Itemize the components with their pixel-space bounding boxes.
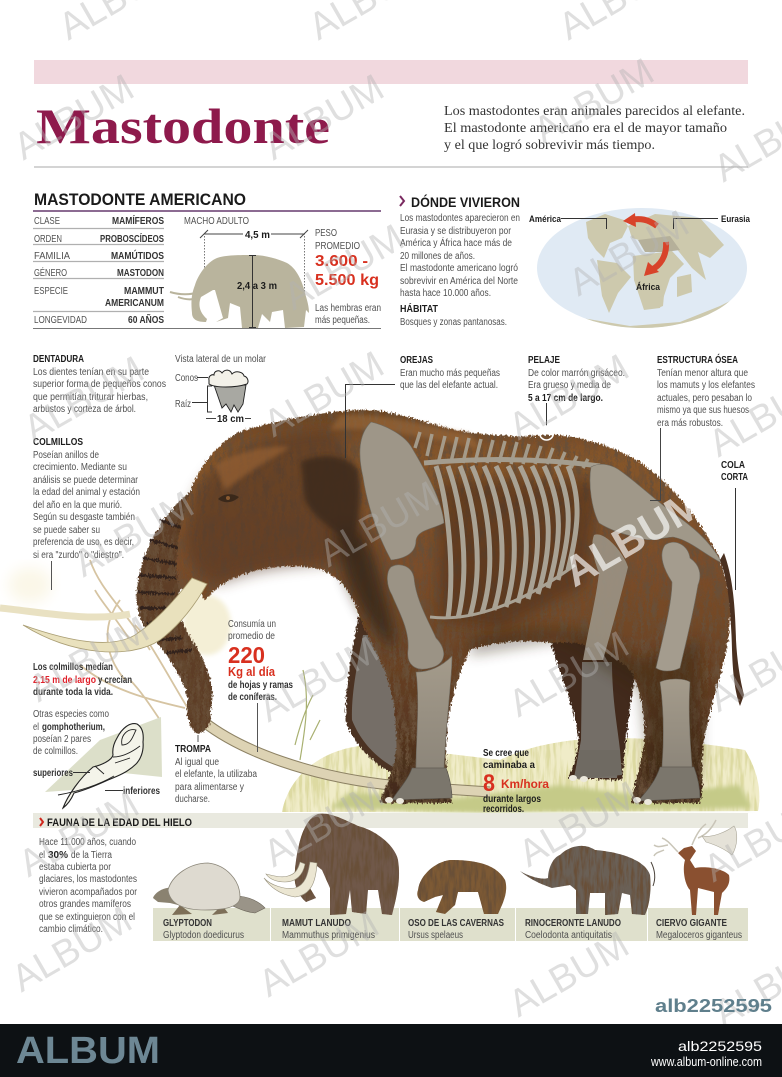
panel: donde vivieron [400, 195, 751, 340]
taxonomy table: MASTODON [117, 268, 164, 279]
text: trompa: para alimentarse y [175, 782, 244, 793]
watermarks: ALBUM [17, 349, 151, 451]
silhouette with dimensions: 4,5 m [245, 230, 270, 241]
tail [720, 553, 744, 706]
text: colmillos: Según su desgaste también [33, 512, 135, 523]
hind foot bones [638, 767, 700, 801]
molar diagram: Raíz [175, 399, 191, 410]
text: fauna: que se extinguieron con el [39, 912, 135, 923]
text: colmillos largo: 2,15 m de largo [33, 675, 96, 686]
watermarks: ALBUM [257, 344, 391, 446]
text: estructura osea: Tenían menor altura que [657, 368, 748, 379]
footer logo: ALBUM [16, 1030, 160, 1072]
molar diagram: Vista lateral de un molar [175, 354, 267, 365]
animal: glyptodon [153, 863, 265, 915]
animal names: GLYPTODON [163, 918, 212, 929]
animal names: Ursus spelaeus [408, 930, 463, 941]
taxonomy table: GÉNERO [34, 266, 67, 279]
watermarks: ALBUM [512, 774, 646, 876]
watermarks: ALBUM [562, 203, 696, 305]
heading: donde vivieron: DÓNDE VIVIERON [411, 195, 520, 210]
text: dentadura [33, 353, 166, 415]
scapula [360, 422, 444, 560]
text: consumo diario: Consumía un [228, 619, 276, 630]
animal names: RINOCERONTE LANUDO [525, 918, 621, 929]
text: colmillos: del año en la que murió. [33, 500, 122, 511]
text: velocidad: Km/hora [501, 777, 549, 791]
ribs [430, 466, 577, 618]
map labels: Eurasia [721, 214, 751, 225]
text: gomphotherium: de colmillos. [33, 746, 78, 757]
animal: ciervo gigante [654, 820, 737, 915]
panel: fauna de la edad del hielo [33, 813, 748, 941]
text: pelaje: PELAJE [528, 354, 560, 366]
text: colmillos largo: Los colmillos medían [33, 662, 113, 673]
animal: oso de las cavernas [417, 860, 506, 914]
text: donde vivieron: Los mastodontes aparecieron en [400, 213, 520, 224]
taxonomy table: FAMILIA [34, 251, 70, 262]
text: orejas [400, 354, 500, 391]
text: colmillos largo [33, 662, 132, 698]
skull diagram: superiores [33, 768, 73, 779]
text: gomphotherium: el [33, 722, 39, 733]
animal: rinoceronte lanudo [520, 846, 655, 915]
molar diagram: 18 cm [217, 414, 244, 425]
animal names: OSO DE LAS CAVERNAS [408, 918, 504, 929]
text: fauna: cambio climático. [39, 924, 103, 935]
text: cola corta: COLA [721, 459, 745, 471]
taxonomy table: 60 AÑOS [128, 313, 164, 326]
text: velocidad: durante largos [483, 794, 541, 805]
watermarks: ALBUM [502, 624, 636, 726]
world map [529, 208, 751, 340]
footer [0, 1024, 782, 1077]
taxonomy table [33, 214, 164, 326]
toenails [385, 775, 652, 805]
map labels [529, 214, 751, 293]
watermarks: ALBUM [257, 774, 391, 876]
average weight: 3.600 - [315, 253, 368, 270]
text: colmillos: análisis se puede determinar [33, 475, 139, 486]
average weight: Las hembras eran [315, 303, 381, 314]
text: donde vivieron: Bosques y zonas pantanosas. [400, 317, 507, 328]
text: pelaje [528, 354, 625, 404]
watermarks: ALBUM [252, 629, 386, 731]
average weight [315, 228, 381, 326]
fur shading [185, 415, 700, 780]
eye [218, 494, 239, 502]
skull diagram: inferiores [123, 786, 160, 797]
text: estructura osea: actuales, pero pesaban lo [657, 393, 752, 404]
footer id: alb2252595 [678, 1038, 762, 1054]
animal names: Glyptodon doedicurus [163, 930, 244, 941]
taxonomy table: MAMÚTIDOS [111, 249, 164, 262]
average weight: PESO [315, 228, 337, 239]
stock id: alb2252595 [655, 996, 772, 1016]
watermarks: ALBUM [257, 67, 391, 169]
intro text: Los mastodontes eran animales parecidos al elefante. [444, 104, 745, 119]
text: trompa: Al igual que [175, 757, 219, 768]
text: orejas: OREJAS [400, 354, 433, 366]
animal names: MAMUT LANUDO [282, 918, 351, 929]
leader line: cola [734, 488, 736, 590]
text: velocidad: Se cree que [483, 748, 529, 759]
header band [34, 60, 748, 84]
skeleton overlay [360, 422, 722, 805]
text: consumo diario: 220 [228, 642, 265, 668]
text: donde vivieron: HÁBITAT [400, 302, 438, 315]
text: pelaje: De color marrón grisáceo. [528, 368, 625, 379]
text: dentadura: arbustos y corteza de árbol. [33, 404, 136, 415]
taxonomy table: MAMÍFEROS [112, 214, 164, 227]
animal names: Megaloceros giganteus [656, 930, 742, 941]
text: consumo diario: Kg al día [228, 664, 276, 679]
text: orejas: Eran mucho más pequeñas [400, 368, 500, 379]
taxonomy table: ORDEN [34, 234, 62, 245]
text: velocidad: recorridos. [483, 804, 524, 815]
watermarks: ALBUM [502, 924, 636, 1026]
text: colmillos: crecimiento. Mediante su [33, 462, 127, 473]
watermarks: ALBUM [502, 347, 636, 449]
text: consumo diario: promedio de [228, 631, 275, 642]
text: fauna: glaciares, los mastodontes [39, 874, 137, 885]
text: colmillos [33, 436, 140, 561]
average weight: 5.500 kg [315, 272, 379, 289]
text: donde vivieron: América y África hace más de [400, 236, 512, 249]
text: colmillos: si era "zurdo" o "diestro". [33, 550, 124, 561]
watermarks: ALBUM [22, 609, 156, 711]
text: colmillos: preferencia de uso, es decir, [33, 537, 134, 548]
text: dentadura: DENTADURA [33, 353, 84, 365]
text: donde vivieron: hasta hace 10.000 años. [400, 288, 491, 299]
text: trompa: ducharse. [175, 794, 210, 805]
watermarks: ALBUM [67, 484, 201, 586]
intro text: El mastodonte americano era el de mayor tamaño [444, 121, 727, 136]
taxonomy table: PROBOSCÍDEOS [100, 232, 164, 245]
fur marker [540, 403, 554, 440]
far femur [583, 534, 628, 660]
text: colmillos: Poseían anillos de [33, 450, 99, 461]
tibia [660, 679, 692, 767]
text: colmillos: COLMILLOS [33, 436, 83, 448]
watermarks: ALBUM [12, 784, 146, 886]
animal names: Coelodonta antiquitatis [525, 930, 612, 941]
text: gomphotherium: Otras especies como [33, 709, 109, 720]
taxonomy table: ESPECIE [34, 286, 68, 297]
average weight: más pequeñas. [315, 315, 370, 326]
text: fauna: estaba cubierta por [39, 862, 112, 873]
text: colmillos: la edad del animal y estación [33, 487, 140, 498]
text: trompa: TROMPA [175, 743, 211, 755]
text: fauna: vivieron acompañados por [39, 887, 138, 898]
silhouette with dimensions [170, 216, 309, 328]
leader line: orejas [346, 384, 395, 458]
ear [301, 456, 360, 545]
intro text [444, 104, 745, 153]
watermarks: ALBUM [277, 217, 411, 319]
pelvis [590, 464, 722, 563]
text: fauna: Hace 11.000 años, cuando [39, 837, 136, 848]
vertebrae [415, 432, 588, 468]
femur [656, 542, 700, 671]
text: consumo diario: de hojas y ramas [228, 680, 293, 691]
title: Mastodonte [36, 98, 330, 154]
far hind foot [574, 750, 622, 779]
leader lines [52, 561, 258, 752]
text: velocidad [483, 748, 549, 815]
body with fur [177, 410, 730, 803]
text: fauna: de la Tierra [71, 850, 112, 861]
panel: mastodonte americano [33, 190, 381, 328]
text: orejas: que las del elefante actual. [400, 380, 498, 391]
text: donde vivieron: Eurasia y se distribuyeron por [400, 226, 512, 237]
text: estructura osea: ESTRUCTURA ÓSEA [657, 353, 738, 366]
text: consumo diario [228, 619, 293, 703]
watermarks: ALBUM [312, 474, 446, 576]
silhouette with dimensions: MACHO ADULTO [184, 216, 249, 227]
heading: fauna: FAUNA DE LA EDAD DEL HIELO [47, 817, 192, 829]
text: colmillos largo: y crecían [98, 675, 132, 686]
text: fauna: otros grandes mamíferos [39, 899, 131, 910]
grass [282, 670, 759, 813]
branches [0, 560, 490, 792]
text: colmillos largo: durante toda la vida. [33, 687, 113, 698]
text: velocidad: 8 [483, 770, 495, 797]
silhouette with dimensions: 2,4 a 3 m [237, 281, 277, 292]
text: estructura osea [657, 353, 755, 429]
text: pelaje: 5 a 17 cm de largo. [528, 393, 603, 404]
text: consumo diario: de coníferas. [228, 692, 277, 703]
label band [153, 908, 748, 941]
text: velocidad: caminaba a [483, 760, 535, 771]
foreleg bones [416, 656, 452, 768]
watermarks: ALBUM [527, 51, 661, 153]
taxonomy table: CLASE [34, 216, 60, 227]
heading: mastodonte americano: MASTODONTE AMERICANO [34, 190, 246, 209]
text: donde vivieron: El mastodonte americano logró [400, 263, 518, 274]
text: dentadura: superior forma de pequeños conos [33, 379, 166, 390]
animal names [163, 918, 742, 941]
background foliage [8, 567, 231, 655]
text: donde vivieron [400, 213, 520, 328]
footer url: www.album-online.com [650, 1055, 762, 1069]
taxonomy table: AMERICANUM [105, 298, 164, 309]
text: cola corta [721, 459, 748, 483]
panel: mastodon illustration [0, 384, 759, 813]
text: pelaje: Era grueso y media de [528, 380, 611, 391]
text: estructura osea: mismo ya que sus huesos [657, 405, 749, 416]
watermarks: ALBUM [7, 67, 141, 169]
animal: mamut lanudo [264, 814, 399, 915]
humerus [387, 565, 444, 669]
spine [424, 460, 600, 466]
far legs [346, 610, 640, 780]
trunk [137, 488, 215, 733]
watermarks: ALBUM [5, 899, 139, 1001]
animal names: CIERVO GIGANTE [656, 918, 727, 929]
map labels: África [636, 282, 661, 293]
taxonomy table: MAMMUT [124, 286, 164, 297]
text: dentadura: que permitían triturar hierbas, [33, 392, 148, 403]
text: cola corta: CORTA [721, 471, 748, 483]
text: donde vivieron: 20 millones de años. [400, 251, 475, 262]
text: gomphotherium: poseían 2 pares [33, 734, 91, 745]
text: colmillos: se puede saber su [33, 525, 100, 536]
text: dentadura: Los dientes tenían en su parte [33, 367, 149, 378]
skull diagram [33, 717, 162, 808]
text: trompa [175, 743, 257, 805]
leader line: hueso [650, 428, 660, 500]
text: fauna [39, 837, 138, 935]
text: estructura osea: era más robustos. [657, 418, 723, 429]
white watermark on body: ALBUM [555, 479, 710, 596]
average weight: PROMEDIO [315, 241, 360, 252]
molar diagram: Conos [175, 373, 198, 384]
taxonomy table: LONGEVIDAD [34, 315, 87, 326]
front foot bones [392, 768, 452, 800]
text: fauna: 30% [48, 850, 68, 861]
animal names: Mammuthus primigenius [282, 930, 375, 941]
text: estructura osea: los mamuts y los elefantes [657, 380, 755, 391]
text: donde vivieron: sobrevivir en América del Norte [400, 276, 518, 287]
tusk [23, 578, 207, 652]
molar diagram [175, 354, 267, 425]
text: trompa: el elefante, la utilizaba [175, 769, 257, 780]
text: fauna: el [39, 850, 45, 861]
map labels: América [529, 214, 562, 225]
text: gomphotherium [33, 709, 109, 757]
intro text: y el que logró sobrevivir más tiempo. [444, 138, 655, 153]
watermarks: ALBUM [252, 904, 386, 1006]
text: gomphotherium: gomphotherium, [42, 722, 105, 733]
